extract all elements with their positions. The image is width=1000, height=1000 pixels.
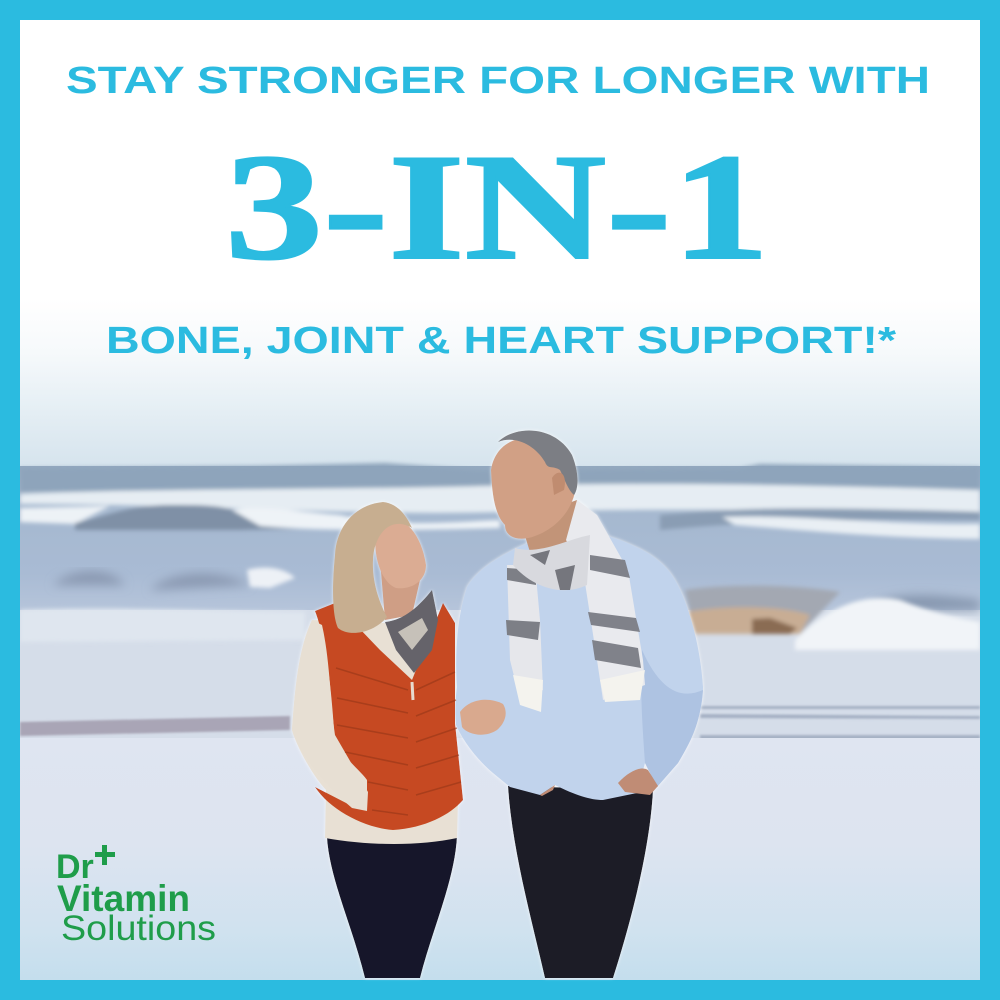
logo Solutions: Solutions: [61, 909, 216, 948]
man sleeve shading: [641, 650, 703, 787]
scarf left strip: [507, 565, 543, 700]
woman sweater: [292, 620, 458, 844]
man sweater: [455, 530, 703, 800]
scarf fringe: [513, 670, 645, 712]
heading bottom line: BONE, JOINT & HEART SUPPORT!*: [106, 320, 896, 362]
vest quilting: [336, 668, 461, 815]
man: [455, 431, 703, 978]
shore rocks and foam: [247, 568, 295, 588]
man trousers: [508, 786, 653, 978]
woman neck: [380, 560, 420, 620]
woman hand: [460, 700, 506, 735]
logo: [56, 845, 216, 948]
man hands in pockets: [618, 769, 658, 795]
scarf loop: [513, 535, 590, 590]
man head: [491, 437, 575, 539]
man neck: [520, 500, 580, 552]
woman: [292, 502, 506, 978]
woman leggings: [327, 836, 457, 978]
wet sand: [20, 610, 980, 740]
sea: [20, 466, 980, 626]
man hair: [498, 431, 578, 495]
beach: [20, 738, 980, 980]
woman scarf: [385, 590, 438, 673]
logo plus: [95, 845, 115, 865]
waves: [20, 463, 980, 539]
beach streaks: [20, 706, 980, 740]
scarf right strip: [566, 500, 645, 700]
heading top line: STAY STRONGER FOR LONGER WITH: [66, 60, 930, 102]
woman face: [375, 517, 426, 588]
sky: [20, 20, 980, 472]
logo Vitamin: Vitamin: [57, 878, 190, 919]
man scarf: [506, 500, 645, 712]
man ear: [552, 473, 565, 495]
heading 3-in-1: 3-IN-1: [225, 123, 770, 291]
woman vest: [315, 603, 463, 830]
couple: [292, 431, 703, 978]
woman hair: [333, 502, 412, 633]
woman arm sleeve: [292, 620, 368, 811]
logo Dr: Dr: [56, 848, 94, 886]
vest zipper: [412, 682, 413, 700]
